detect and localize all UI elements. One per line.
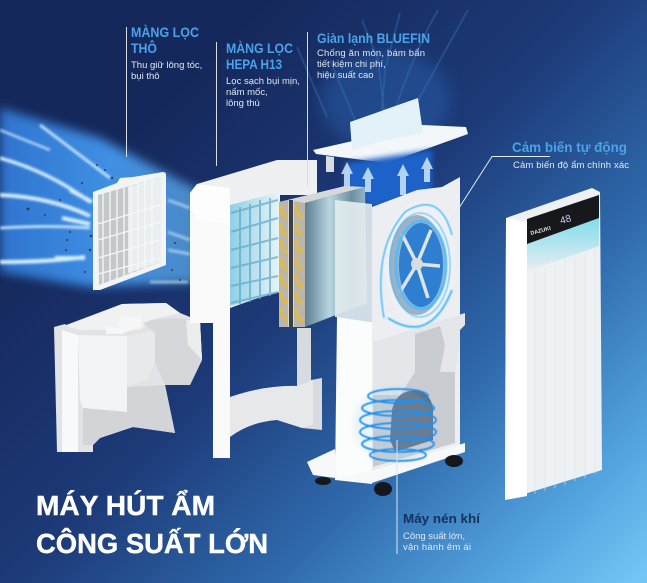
water tank housing, lower left: [54, 303, 202, 452]
callout: compressor: [397, 440, 480, 554]
callout: BLUEFIN coil: Chống ăn mòn, bám bẩn: [317, 48, 425, 59]
humidity readout: 48: [559, 213, 573, 227]
front panel with display: [505, 188, 602, 500]
title: MÁY HÚT ẨM: [36, 490, 215, 521]
dust particles: [27, 164, 181, 281]
callout: BLUEFIN coil: [308, 30, 430, 186]
callout: coarse filter: Thu giữ lông tóc,: [131, 60, 202, 71]
callout: coarse filter: [126, 24, 202, 157]
callout: compressor: vận hành êm ái: [403, 542, 471, 553]
base plate: [307, 443, 465, 483]
callout: HEPA filter: nấm mốc,: [226, 87, 268, 98]
callout: HEPA filter: HEPA H13: [226, 56, 282, 72]
main unit body: [307, 177, 465, 484]
blue condenser coil: [279, 186, 367, 328]
callout: coarse filter: bụi thô: [131, 71, 160, 82]
filter: coarse mesh: [93, 172, 166, 290]
fan with blue swirl: [381, 201, 456, 327]
callout: humidity sensor: Cảm biến độ ẩm chính xác: [513, 160, 629, 171]
compressor with sound waves: [353, 387, 437, 463]
airflow streaks top centre: [297, 10, 468, 120]
callout: HEPA filter: MÀNG LỌC: [226, 40, 293, 56]
callout: HEPA filter: Lọc sạch bụi mịn,: [226, 76, 300, 87]
callout: coarse filter: MÀNG LỌC: [131, 24, 199, 40]
title: CÔNG SUẤT LỚN: [36, 527, 268, 559]
callout: BLUEFIN coil: hiệu suất cao: [317, 70, 374, 81]
brand logo: DAZUKI: [530, 226, 552, 237]
callout: humidity sensor: Cảm biến tự động: [512, 139, 627, 155]
callout: compressor: Máy nén khí: [403, 511, 480, 526]
condenser top shelf: [313, 98, 468, 172]
callout: HEPA filter: [216, 40, 300, 166]
lower ducts: [373, 313, 465, 395]
callout: BLUEFIN coil: Giàn lạnh BLUEFIN: [317, 30, 430, 46]
callout: BLUEFIN coil: tiết kiệm chi phí,: [317, 59, 386, 70]
HEPA housing, middle: [190, 160, 322, 458]
callout: compressor: Công suất lớn,: [403, 531, 465, 542]
up-flow arrows and blue glow: [341, 150, 433, 208]
airflow stream through filter: [0, 108, 198, 287]
callout: coarse filter: THÔ: [131, 39, 157, 56]
lower curved band: [297, 328, 322, 430]
callout: humidity sensor: [450, 139, 629, 222]
glow above condenser: [320, 50, 450, 150]
castor wheels: [315, 455, 463, 496]
title: [36, 490, 268, 559]
callout: HEPA filter: lông thú: [226, 98, 260, 109]
